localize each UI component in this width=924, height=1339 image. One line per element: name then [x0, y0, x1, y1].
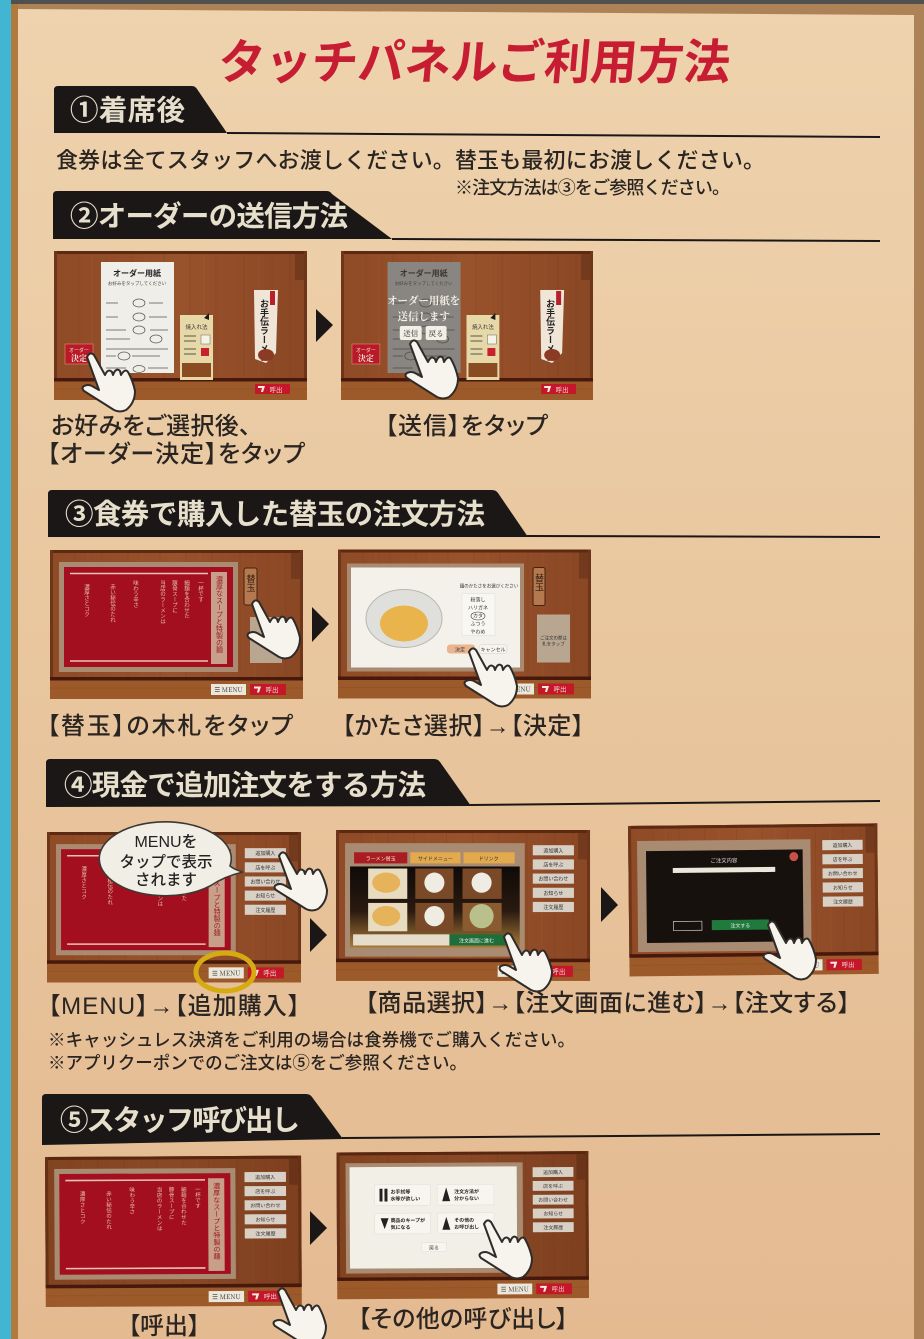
panel: firmness selection: 決定: [455, 646, 465, 654]
heading: section 1: ①着席後: [70, 95, 185, 127]
panel: call button: [45, 1156, 302, 1307]
heading: section 3: [48, 490, 880, 538]
panel: other call options: 戻る: [429, 1245, 439, 1252]
icon: tapping hand, place order: [764, 921, 816, 980]
callout: tap to display: [99, 822, 243, 896]
panel: firmness selection: 粉落し: [470, 596, 486, 604]
title: タッチパネルご利用方法: [216, 23, 734, 93]
arrow: [601, 887, 618, 922]
icon: tapping hand, additional purchase: [274, 852, 327, 910]
icon: tapping hand, refill tag: [248, 600, 300, 658]
callout: tap to display: タップで表示: [119, 853, 213, 871]
panel: send confirmation screen: 戻る: [429, 328, 444, 339]
text: instruction: 食券は全てスタッフへお渡しください。替玉も最初にお渡しください。: [56, 148, 765, 173]
section 5: calling staff: [42, 1094, 880, 1339]
caption: select and tap order: [47, 413, 305, 468]
heading: section 5: [42, 1094, 880, 1145]
panel: send confirmation screen: 送信: [403, 328, 419, 339]
callout: tap to display: MENUを: [134, 833, 198, 851]
heading: section 5: ⑤スタッフ呼び出し: [60, 1105, 300, 1137]
panel: product selection: ラーメン替玉: [366, 855, 396, 862]
arrow: [310, 1211, 327, 1245]
section 4: additional cash order: [46, 759, 880, 1073]
panel: product selection: [336, 830, 590, 981]
panel: order sheet screen: [54, 251, 307, 400]
notes: cashless and app coupon: [48, 1030, 575, 1073]
caption: select and tap order: お好みをご選択後、: [51, 413, 251, 440]
icon: tapping hand, proceed to order: [500, 933, 552, 992]
panel: product selection: 注文画面に進む: [459, 937, 494, 944]
icon: tapping hand, order confirm: [82, 353, 135, 412]
panel: order confirmation: [628, 823, 879, 976]
panel: send confirmation screen: [341, 251, 593, 400]
heading: section 2: ②オーダーの送信方法: [70, 200, 348, 233]
panel: other call options: お呼び出し: [454, 1224, 479, 1231]
panel: firmness selection: カタ: [473, 612, 483, 620]
heading: section 1: [54, 86, 880, 138]
panel: other call options: [336, 1151, 589, 1299]
panel: other call options: 商品のキープが: [391, 1217, 425, 1224]
panel: send confirmation screen: 送信します: [398, 308, 450, 323]
arrow: [316, 309, 333, 342]
caption: select, proceed, order: 【商品選択】→【注文画面に進む】→【注文する】: [365, 990, 850, 1017]
panel: menu with wooden tag: [50, 550, 303, 699]
icon: tapping hand, call: [274, 1288, 326, 1339]
highlight ring: MENU button: [196, 953, 254, 991]
panel: other call options: お手拭等: [390, 1189, 410, 1196]
section 3: ordering a noodle refill: [47, 490, 880, 740]
panel: send confirmation screen: オーダー用紙を: [387, 292, 460, 307]
heading: section 3: ③食券で購入した替玉の注文方法: [65, 499, 485, 531]
callout: tap to display: されます: [135, 871, 197, 889]
heading: section 4: [46, 759, 880, 807]
icon: tapping hand, send: [406, 340, 458, 398]
panel: order confirmation: ご注文内容: [710, 856, 738, 865]
panel: menu opened: [47, 832, 301, 982]
panel: menu with wooden tag: 替玉: [246, 573, 256, 592]
arrow: [312, 607, 329, 642]
section 2: sending the order: [47, 191, 880, 468]
panel: other call options: 分からない: [454, 1195, 479, 1202]
section 1: after being seated: [54, 86, 880, 198]
icon: tapping hand, other call: [480, 1220, 532, 1278]
panel: firmness selection: ご注文の際は: [540, 634, 567, 642]
caption: tap send: 【送信】をタップ: [385, 413, 548, 440]
panel: product selection: ドリンク: [479, 855, 499, 862]
notes: cashless and app coupon: ※キャッシュレス決済をご利用の場合は食券機でご購入ください。: [48, 1030, 575, 1050]
notes: cashless and app coupon: ※アプリクーポンでのご注文は⑤をご参照ください。: [48, 1053, 467, 1073]
panel: other call options: 水等が欲しい: [390, 1195, 420, 1202]
panel: firmness selection: ハリガネ: [468, 604, 488, 612]
caption: tap refill tag: 【替玉】の木札をタップ: [47, 713, 293, 740]
panel: firmness selection: 札をタップ: [542, 640, 565, 648]
icon: tapping hand, decide: [464, 648, 517, 706]
panel: firmness selection: [338, 550, 591, 698]
panel: firmness selection: ふつう: [470, 620, 486, 628]
panel: firmness selection: 替玉: [534, 572, 544, 592]
heading: section 2: [53, 191, 880, 242]
panel: firmness selection: キャンセル: [480, 646, 506, 654]
panel: product selection: サイドメニュー: [418, 855, 453, 862]
panel: other call options: 気になる: [391, 1224, 411, 1231]
panel: firmness selection: やわめ: [470, 628, 486, 636]
panel: other call options: その他の: [454, 1217, 474, 1224]
caption: select and tap order: 【オーダー決定】をタップ: [47, 441, 305, 468]
heading: section 4: ④現金で追加注文をする方法: [64, 770, 426, 802]
text: note: ※注文方法は③をご参照ください。: [455, 178, 730, 198]
caption: MENU then additional purchase: 【MENU】→【追加購入】: [48, 993, 300, 1020]
arrow: [310, 918, 327, 952]
panel: other call options: 注文方法が: [454, 1188, 479, 1195]
panel: firmness selection: 麺のかたさをお選びください: [460, 582, 519, 590]
caption: other call: 【その他の呼び出し】: [358, 1306, 568, 1333]
panel: order confirmation: 注文する: [730, 922, 750, 929]
caption: firmness then decide: 【かたさ選択】→【決定】: [342, 713, 584, 740]
